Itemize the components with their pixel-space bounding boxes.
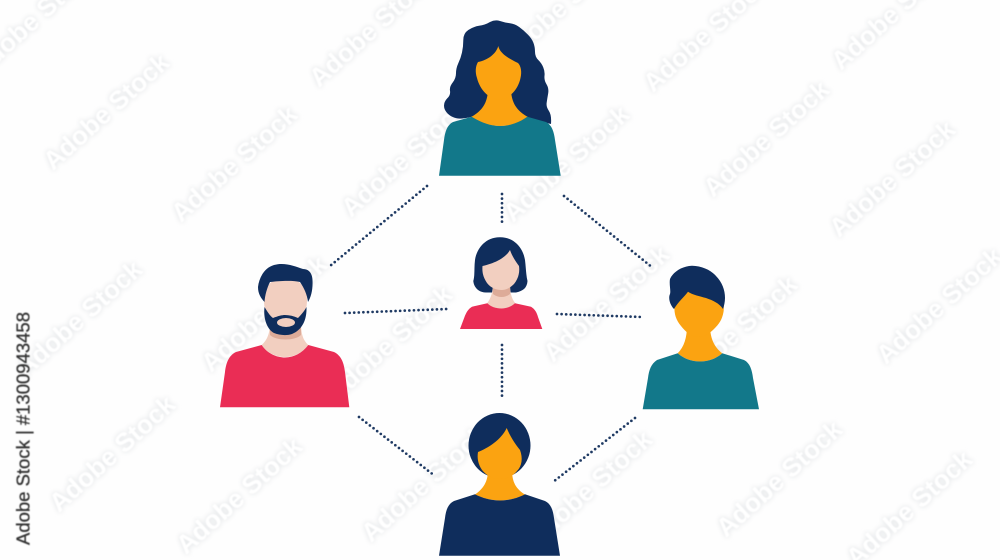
person: centre woman xyxy=(460,237,542,329)
watermark pattern: Adobe Stock xyxy=(697,74,835,203)
watermark pattern: Adobe Stock xyxy=(195,249,333,378)
person: right person with short hair xyxy=(643,266,759,409)
person: top woman with curly hair xyxy=(439,20,561,176)
watermark pattern: Adobe Stock xyxy=(520,424,658,553)
watermark pattern: Adobe Stock xyxy=(165,99,303,228)
watermark pattern: Adobe Stock xyxy=(335,94,473,223)
watermark pattern: Adobe Stock xyxy=(823,114,961,243)
watermark pattern: Adobe Stock xyxy=(43,389,181,518)
watermark pattern: Adobe Stock xyxy=(37,47,175,176)
watermark pattern: Adobe Stock xyxy=(710,414,848,543)
watermark pattern: Adobe Stock xyxy=(10,254,148,383)
person: left man with beard xyxy=(220,264,349,407)
watermark pattern: Adobe Stock xyxy=(497,99,635,228)
person: bottom woman with bob hair xyxy=(439,413,560,556)
watermark pattern: Adobe Stock xyxy=(665,269,803,398)
watermark pattern: Adobe Stock xyxy=(537,239,675,368)
watermark pattern: Adobe Stock xyxy=(320,279,458,408)
stock id label: Adobe Stock | #1300943458 xyxy=(12,312,34,545)
watermark pattern: Adobe Stock xyxy=(355,419,493,548)
dotted connector lines xyxy=(330,186,653,482)
watermark pattern: Adobe Stock xyxy=(170,431,308,560)
